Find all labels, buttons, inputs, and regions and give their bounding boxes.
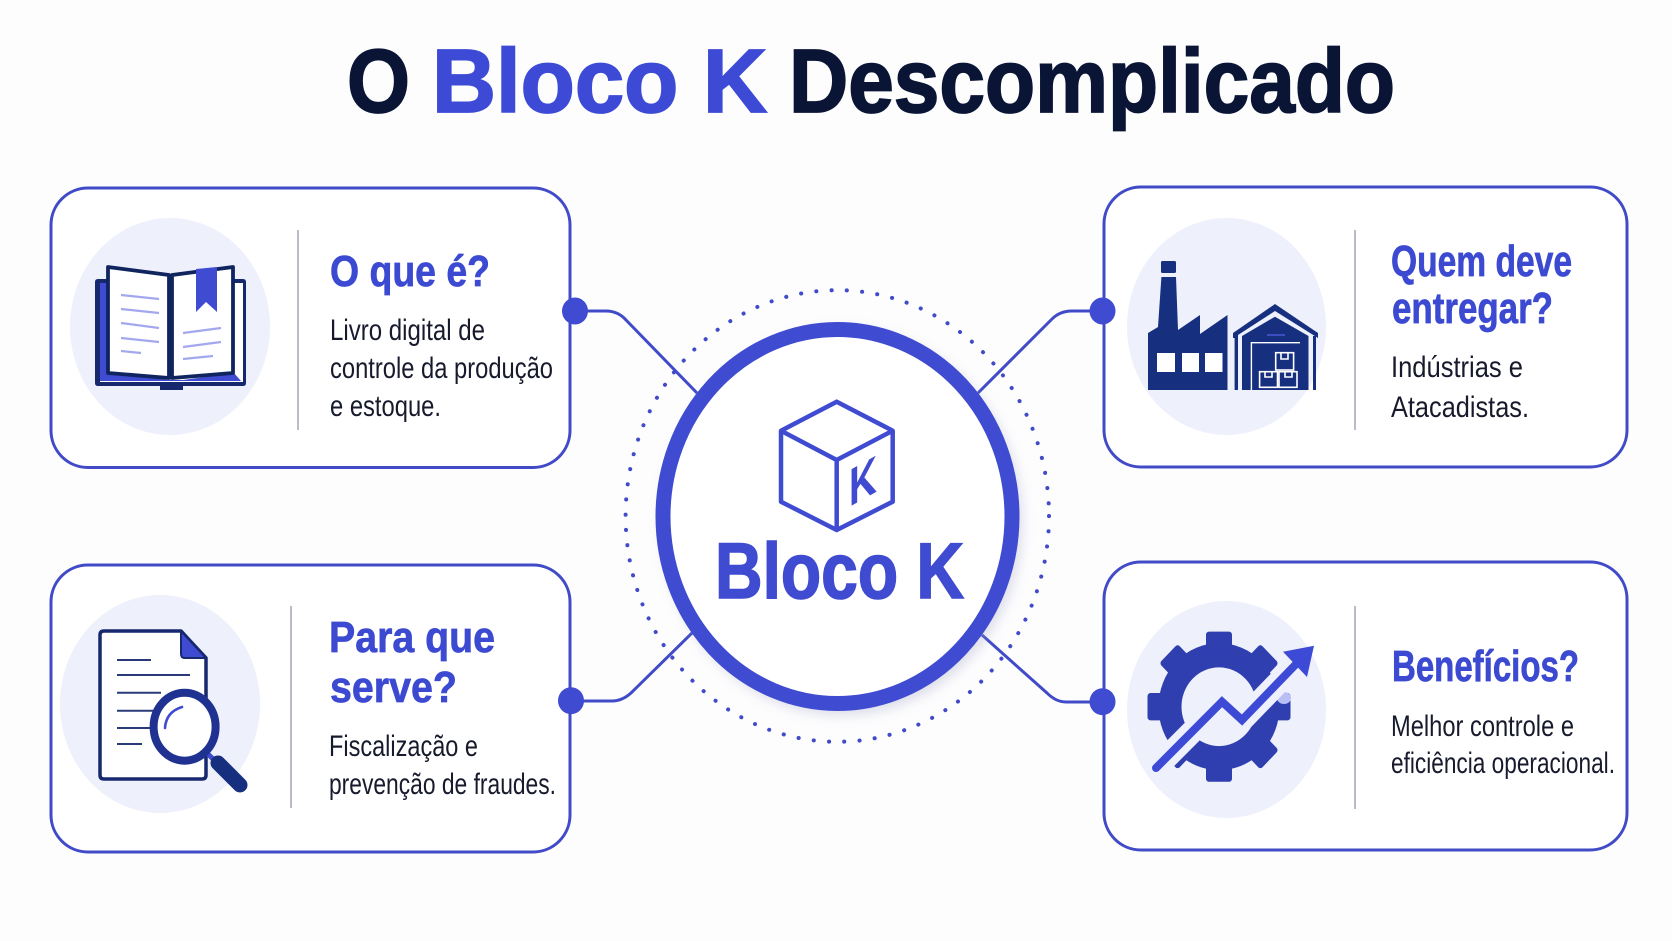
description bbox=[329, 730, 556, 801]
heading: Para que bbox=[329, 613, 495, 662]
title: O bbox=[347, 32, 410, 132]
heading: O que é? bbox=[330, 247, 490, 296]
dotted ring bbox=[626, 290, 1049, 742]
connector lines bbox=[571, 311, 1102, 702]
description: Atacadistas. bbox=[1391, 391, 1529, 424]
description: Fiscalização e bbox=[329, 730, 478, 763]
heading: Quem deve bbox=[1391, 237, 1572, 286]
panel: O que é? bbox=[51, 188, 570, 468]
heading bbox=[1391, 237, 1572, 333]
description: Melhor controle e bbox=[1391, 710, 1574, 743]
icon: document with magnifier bbox=[60, 595, 260, 813]
description: e estoque. bbox=[330, 390, 441, 423]
description: Indústrias e bbox=[1391, 351, 1523, 384]
heading: entregar? bbox=[1392, 284, 1553, 333]
title bbox=[347, 32, 1395, 132]
connector dots bbox=[558, 298, 1116, 715]
description bbox=[330, 314, 553, 423]
title: Bloco K bbox=[432, 32, 767, 132]
heading: serve? bbox=[330, 663, 457, 712]
title: Descomplicado bbox=[789, 32, 1395, 132]
icon: open book bbox=[70, 218, 270, 435]
description: controle da produção bbox=[330, 352, 553, 385]
icon: cube with K: K bbox=[849, 444, 877, 519]
panel: Quem deve entregar? bbox=[1104, 187, 1627, 467]
description: prevenção de fraudes. bbox=[329, 768, 556, 801]
heading bbox=[329, 613, 495, 712]
panel: Benefícios? bbox=[1104, 562, 1627, 850]
icon: factory and warehouse bbox=[1127, 218, 1326, 435]
hub ring bbox=[663, 330, 1012, 704]
description: Livro digital de bbox=[330, 314, 485, 347]
heading: Benefícios? bbox=[1392, 642, 1579, 691]
hub label: Bloco K bbox=[715, 526, 964, 615]
description bbox=[1391, 710, 1615, 780]
panel: Para que serve? bbox=[51, 565, 570, 852]
description bbox=[1391, 351, 1529, 424]
icon: cube with K bbox=[781, 402, 893, 530]
icon: gear with growth arrow bbox=[1127, 601, 1326, 818]
central hub bbox=[662, 329, 1022, 715]
